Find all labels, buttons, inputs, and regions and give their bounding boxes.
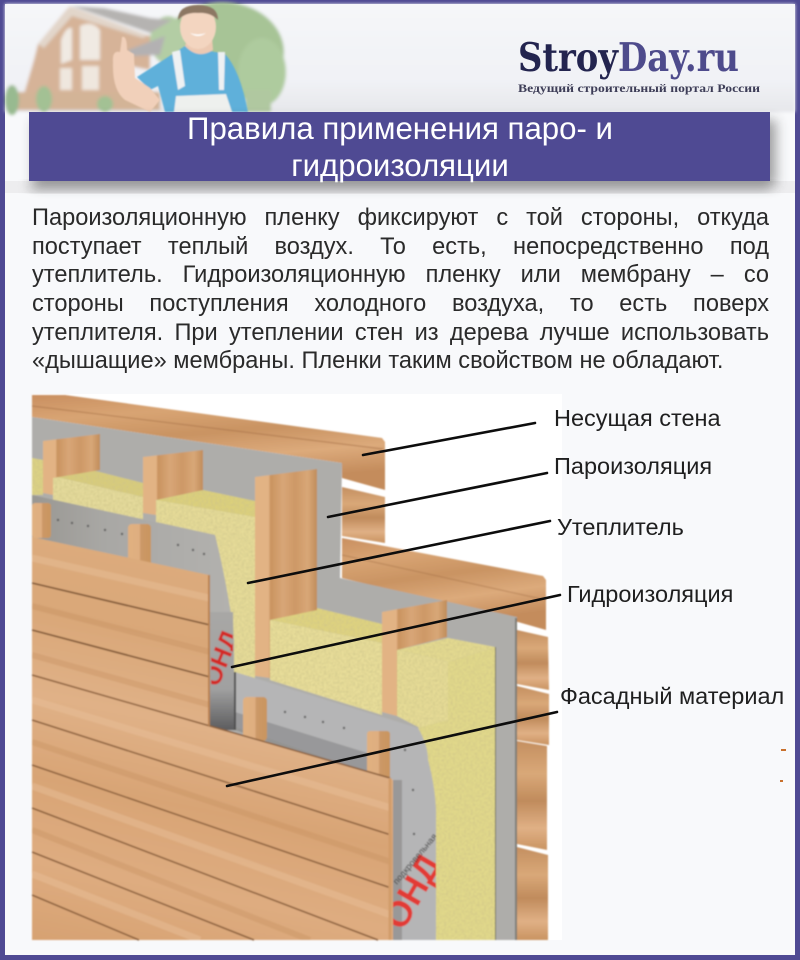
facade boards: [32, 537, 393, 940]
labels: Пароизоляция: [554, 453, 712, 479]
insulation back row: [32, 458, 382, 715]
labels: Несущая стена: [554, 405, 721, 431]
icon: wooden house: [5, 6, 172, 115]
waterproofing membrane: [32, 495, 450, 940]
studs back row: [43, 434, 447, 716]
labels: [554, 405, 784, 709]
labels: Утеплитель: [557, 514, 684, 540]
icon: tree: [150, 2, 286, 112]
leader lines: [227, 423, 560, 786]
body text: утеплителя. При утеплении стен из дерева лучше использовать: [32, 320, 769, 346]
illustration backdrop: [32, 394, 562, 940]
strip under title: [5, 181, 795, 193]
logo: StroyDay.ru: [518, 35, 739, 81]
logo tagline: Ведущий строительный портал России: [518, 81, 760, 95]
artefact marks: [780, 749, 786, 782]
load-bearing wall timber: [32, 395, 549, 940]
body text: поступает теплый воздух. То есть, непосредственно под: [32, 234, 769, 260]
membrane brand print: [196, 625, 450, 936]
body text: утеплитель. Гидроизоляционную пленку или мембрану – со: [32, 262, 769, 288]
title bar: [29, 111, 776, 186]
vapour barrier layer: [32, 417, 517, 940]
furring battens: [32, 503, 390, 781]
body text: «дышащие» мембраны. Пленки таким свойством не обладают.: [32, 348, 723, 374]
body text: [32, 205, 769, 374]
diagram: wall build-up illustration: [32, 395, 549, 940]
labels: Гидроизоляция: [567, 581, 733, 607]
icon: worker mascot: [113, 5, 248, 112]
insulation front block: [397, 638, 495, 940]
title text: гидроизоляции: [291, 148, 509, 183]
header photo banner: [5, 2, 795, 115]
title text: Правила применения паро- и: [187, 111, 613, 146]
membrane brand print: ОНД: [374, 847, 450, 936]
membrane brand print: подкровельная: [391, 831, 439, 886]
labels: Фасадный материал: [560, 683, 784, 709]
body text: Пароизоляционную пленку фиксируют с той стороны, откуда: [32, 205, 769, 231]
membrane dots: [57, 519, 415, 835]
membrane brand print: ОНД: [196, 625, 245, 690]
body text: стороны поступления холодного воздуха, то есть поверх: [32, 291, 769, 317]
